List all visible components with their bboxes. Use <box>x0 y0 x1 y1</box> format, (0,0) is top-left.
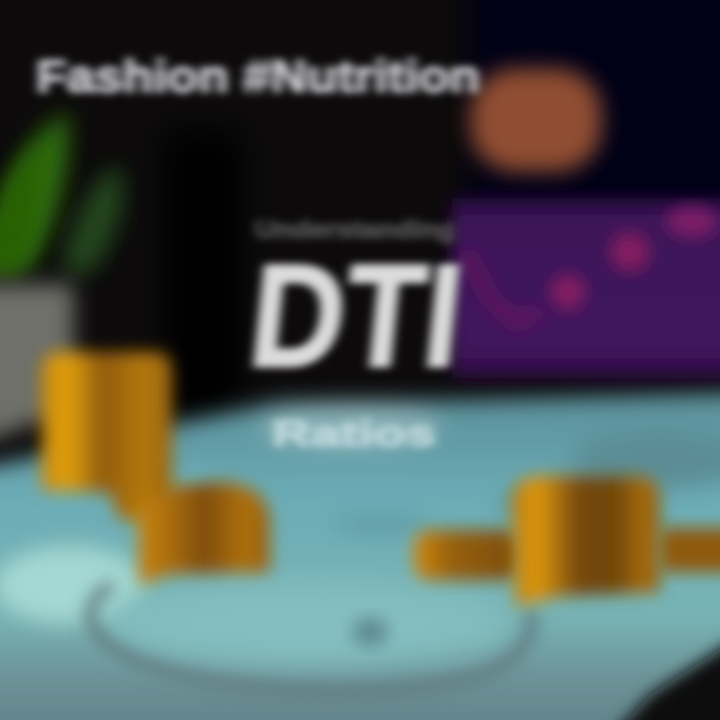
plant pot <box>0 284 74 445</box>
orange circle <box>470 68 602 172</box>
dark corner bottom right <box>600 630 720 720</box>
chart point <box>550 274 586 310</box>
coin stack middle <box>138 482 270 585</box>
coin stack left <box>42 352 175 520</box>
chart point <box>666 206 718 238</box>
coin far right <box>660 528 720 572</box>
table surface <box>0 392 720 720</box>
coin stack right tall <box>512 476 660 606</box>
chart line <box>466 252 540 322</box>
coin stack right flat <box>414 530 520 580</box>
subtitle: Understanding <box>255 216 455 244</box>
chart point <box>610 232 650 272</box>
ratios label: Ratios <box>272 413 436 454</box>
plate on table <box>90 583 532 692</box>
title: Fashion #Nutrition <box>36 50 480 102</box>
plant leaves <box>0 112 123 274</box>
purple chart panel <box>452 198 720 378</box>
DTI heading: DTI <box>243 234 470 398</box>
